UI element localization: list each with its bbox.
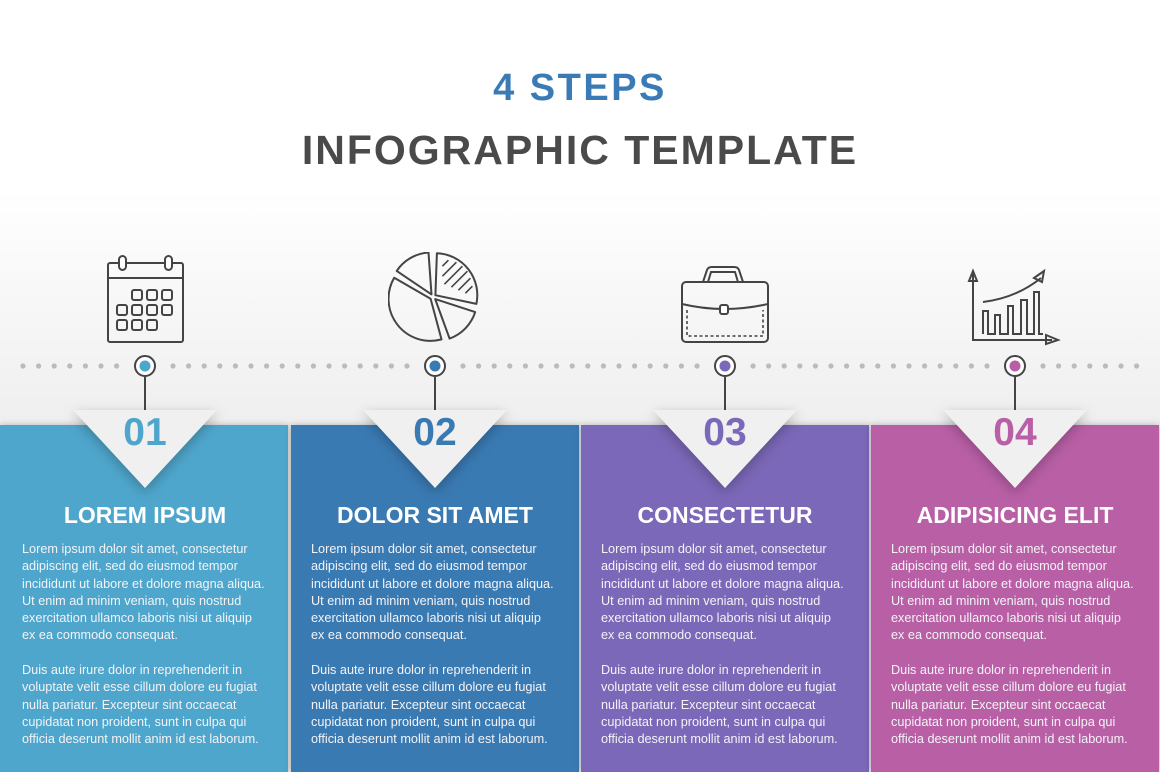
text block 2: Ut enim ad minim veniam, quis nostrud: [311, 594, 530, 608]
text block 4: Ut enim ad minim veniam, quis nostrud: [891, 594, 1110, 608]
pointer triangle 3: [653, 410, 797, 488]
text block 3: adipiscing elit, sed do eiusmod tempor: [601, 559, 817, 573]
panel 4: [871, 425, 1159, 772]
text block 2: nulla pariatur. Excepteur sint occaecat: [311, 698, 525, 712]
number 04: 04: [993, 411, 1037, 454]
text block 1: cupidatat non proident, sunt in culpa qui: [22, 715, 246, 729]
text block 2: incididunt ut labore et dolore magna aliqua.: [311, 577, 554, 591]
text block 4: [891, 542, 1134, 746]
text block 2: Lorem ipsum dolor sit amet, consectetur: [311, 542, 537, 556]
text block 4: adipiscing elit, sed do eiusmod tempor: [891, 559, 1107, 573]
text block 1: exercitation ullamco laboris nisi ut aliquip: [22, 611, 252, 625]
text block 3: Duis aute irure dolor in reprehenderit in: [601, 663, 821, 677]
text block 4: Duis aute irure dolor in reprehenderit in: [891, 663, 1111, 677]
text block 1: Lorem ipsum dolor sit amet, consectetur: [22, 542, 248, 556]
text block 4: incididunt ut labore et dolore magna aliqua.: [891, 577, 1134, 591]
panel 1: [0, 425, 288, 772]
text block 1: Duis aute irure dolor in reprehenderit in: [22, 663, 242, 677]
text block 1: nulla pariatur. Excepteur sint occaecat: [22, 698, 236, 712]
text block 3: [601, 542, 844, 746]
text block 2: Duis aute irure dolor in reprehenderit in: [311, 663, 531, 677]
heading 3: CONSECTETUR: [637, 502, 813, 528]
text block 2: adipiscing elit, sed do eiusmod tempor: [311, 559, 527, 573]
heading 1: LOREM IPSUM: [64, 502, 226, 528]
text block 1: adipiscing elit, sed do eiusmod tempor: [22, 559, 238, 573]
icon: calendar: [107, 255, 184, 343]
title: 4 STEPS: [493, 67, 667, 109]
icon: briefcase: [681, 266, 769, 343]
heading 4: ADIPISICING ELIT: [917, 502, 1113, 528]
text block 3: Lorem ipsum dolor sit amet, consectetur: [601, 542, 827, 556]
text block 3: incididunt ut labore et dolore magna aliqua.: [601, 577, 844, 591]
text block 2: voluptate velit esse cillum dolore eu fugiat: [311, 680, 546, 694]
heading 2: DOLOR SIT AMET: [337, 502, 533, 528]
timeline: dotted line, markers: [20, 355, 1140, 410]
number 03: 03: [703, 411, 747, 454]
text block 2: ex ea commodo consequat.: [311, 628, 467, 642]
pointer triangle 2: [363, 410, 507, 488]
pointer triangle 4: [943, 410, 1087, 488]
text block 4: voluptate velit esse cillum dolore eu fugiat: [891, 680, 1126, 694]
text block 1: [22, 542, 265, 746]
pointer triangle 1: [73, 410, 217, 488]
text block 1: officia deserunt mollit anim id est laborum.: [22, 732, 259, 746]
number 02: 02: [413, 411, 457, 454]
text block 4: officia deserunt mollit anim id est laborum.: [891, 732, 1128, 746]
text block 4: nulla pariatur. Excepteur sint occaecat: [891, 698, 1105, 712]
text block 2: officia deserunt mollit anim id est laborum.: [311, 732, 548, 746]
subtitle: INFOGRAPHIC TEMPLATE: [302, 127, 858, 173]
text block 2: exercitation ullamco laboris nisi ut aliquip: [311, 611, 541, 625]
icon: pie chart: [388, 252, 478, 342]
text block 3: nulla pariatur. Excepteur sint occaecat: [601, 698, 815, 712]
text block 2: [311, 542, 554, 746]
text block 3: officia deserunt mollit anim id est laborum.: [601, 732, 838, 746]
panel 3: [581, 425, 869, 772]
number 01: 01: [123, 411, 167, 454]
text block 3: cupidatat non proident, sunt in culpa qui: [601, 715, 825, 729]
text block 2: cupidatat non proident, sunt in culpa qui: [311, 715, 535, 729]
text block 1: incididunt ut labore et dolore magna aliqua.: [22, 577, 265, 591]
icon: growth chart: [968, 268, 1061, 346]
text block 1: Ut enim ad minim veniam, quis nostrud: [22, 594, 241, 608]
panel 2: [291, 425, 579, 772]
text block 3: voluptate velit esse cillum dolore eu fugiat: [601, 680, 836, 694]
text block 4: ex ea commodo consequat.: [891, 628, 1047, 642]
text block 1: voluptate velit esse cillum dolore eu fugiat: [22, 680, 257, 694]
text block 1: ex ea commodo consequat.: [22, 628, 178, 642]
text block 3: exercitation ullamco laboris nisi ut aliquip: [601, 611, 831, 625]
text block 3: ex ea commodo consequat.: [601, 628, 757, 642]
text block 3: Ut enim ad minim veniam, quis nostrud: [601, 594, 820, 608]
text block 4: Lorem ipsum dolor sit amet, consectetur: [891, 542, 1117, 556]
text block 4: cupidatat non proident, sunt in culpa qui: [891, 715, 1115, 729]
text block 4: exercitation ullamco laboris nisi ut aliquip: [891, 611, 1121, 625]
